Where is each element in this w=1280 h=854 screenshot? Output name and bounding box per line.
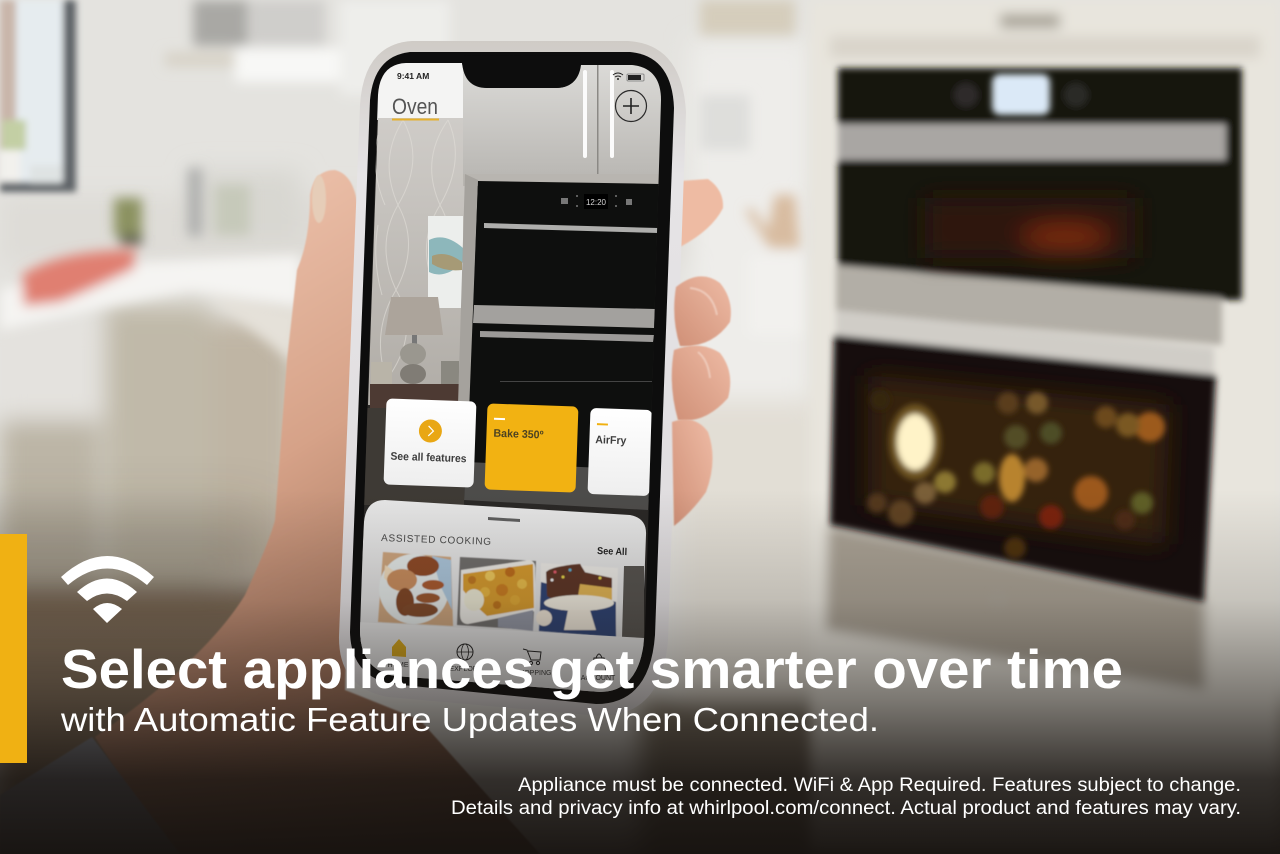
finger two (674, 276, 731, 346)
lower room panel (362, 408, 466, 505)
icon: wifi signal (61, 556, 154, 623)
photo: fourth recipe (622, 566, 644, 640)
title: Select appliances get smarter over time (61, 638, 1123, 700)
disclaimer (451, 775, 1241, 819)
card label: See all features (390, 451, 467, 465)
smartphone (339, 41, 686, 716)
screen backdrop (362, 120, 649, 643)
status bar icons (613, 73, 644, 81)
forearm and palm (95, 170, 540, 854)
disclaimer: Appliance must be connected. WiFi & App Required. Features subject to change. (518, 775, 1241, 796)
status bar time: 9:41 AM (397, 71, 429, 81)
phone screen (360, 63, 661, 692)
assisted cooking sheet (355, 500, 646, 700)
sleeve (0, 737, 180, 854)
wall oven in app: 12:20 (586, 198, 607, 207)
card: see all features (384, 398, 476, 488)
wallpaper pattern (375, 120, 455, 375)
nail highlights (690, 288, 717, 378)
add button (616, 90, 646, 122)
finger three (672, 346, 730, 421)
dark bottom gradient overlay (0, 440, 1280, 854)
table lamp (370, 297, 460, 408)
bottom navigation: HOME (388, 662, 409, 669)
finger four (672, 420, 713, 526)
finger one (680, 179, 723, 247)
blurred double wall oven (810, 0, 1280, 854)
wall art (428, 216, 463, 308)
window (0, 0, 76, 192)
subtitle: with Automatic Feature Updates When Connected. (60, 701, 879, 738)
bottom navigation: EXPLORE (449, 666, 483, 673)
thumb nail (312, 175, 326, 223)
sheet heading: ASSISTED COOKING (381, 533, 491, 548)
bottom navigation (360, 622, 644, 692)
bake label: Bake 350º (493, 428, 544, 441)
disclaimer: Details and privacy info at whirlpool.com/connect. Actual product and features may vary. (451, 798, 1241, 819)
fingers over the phone case (672, 276, 731, 526)
oven heading: Oven (392, 94, 438, 119)
bottom navigation: ACCOUNT (581, 675, 616, 682)
hand holding the phone (0, 170, 723, 854)
yellow accent bar (0, 534, 27, 763)
phone bezel (350, 52, 674, 704)
oven app header (377, 63, 463, 120)
phone case (339, 41, 686, 716)
photo: casserole (457, 557, 536, 631)
bottom navigation: SHOPPING (515, 670, 551, 677)
airfry label: AirFry (595, 434, 627, 447)
lower left shadow (0, 510, 270, 620)
card: airfry (588, 408, 652, 496)
card: bake 350 (485, 403, 578, 493)
chevron button (419, 419, 442, 443)
wall oven in app (464, 181, 664, 510)
photo: layer cake (536, 563, 618, 637)
sheet handle (488, 517, 520, 522)
wallpaper panel (368, 118, 466, 405)
notch (462, 55, 581, 88)
kitchen cabinet (458, 62, 663, 405)
see all link: See All (597, 546, 627, 558)
photo: roast chicken (378, 552, 453, 626)
